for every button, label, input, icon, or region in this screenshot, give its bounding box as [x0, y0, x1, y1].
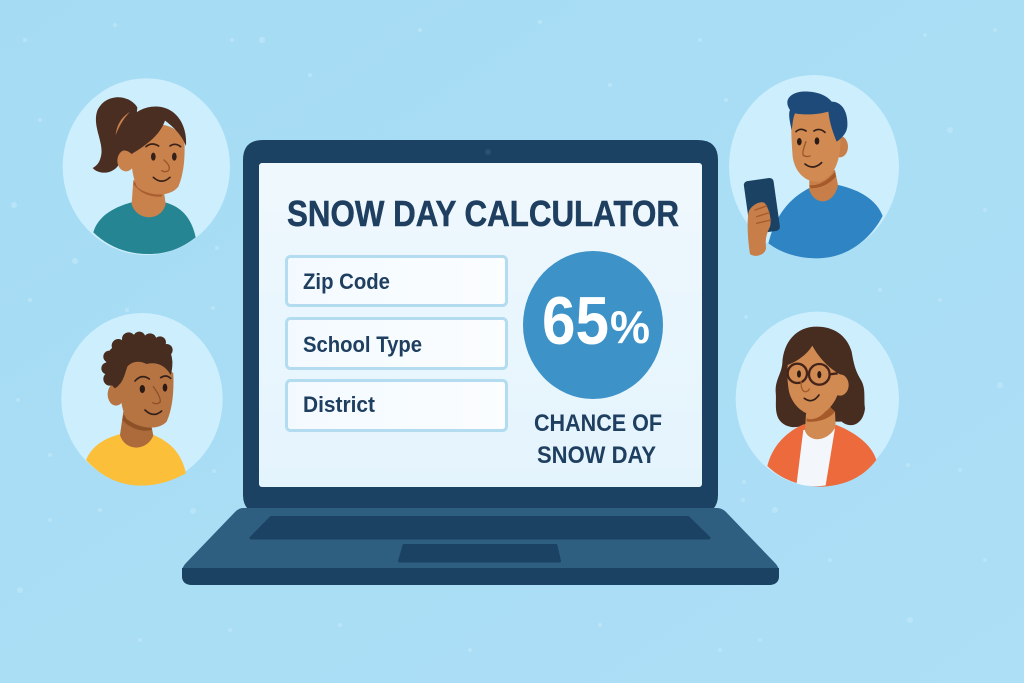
person: woman with glasses [736, 312, 899, 487]
neck [120, 412, 153, 448]
base front edge [182, 568, 779, 585]
facial features [804, 395, 819, 401]
field: district [286, 380, 506, 430]
neck [132, 180, 166, 217]
facial features [135, 376, 171, 414]
field: school type: School Type [303, 332, 422, 357]
face [832, 136, 848, 157]
hair back [776, 327, 865, 427]
neck [809, 170, 838, 201]
result circle: 65%: % [610, 301, 650, 353]
hair [787, 92, 847, 142]
phone [743, 177, 780, 234]
person: woman with ponytail [63, 78, 230, 255]
laptop screen [259, 163, 702, 487]
teal shirt [93, 202, 196, 254]
face [117, 150, 135, 171]
field: zip code [286, 256, 506, 306]
person: man with phone [729, 75, 899, 258]
neck [805, 412, 836, 439]
title: SNOW DAY CALCULATOR [287, 193, 679, 234]
trackpad [400, 546, 560, 561]
keyboard [251, 518, 709, 538]
field: zip code: Zip Code [303, 269, 390, 294]
result circle: 65%: 65 [542, 283, 609, 359]
face [108, 383, 124, 406]
hair top [118, 107, 186, 154]
camera [485, 149, 491, 155]
face [831, 374, 849, 396]
orange jacket [767, 424, 876, 487]
laptop [182, 140, 779, 585]
ponytail [93, 97, 137, 173]
facial features [796, 129, 825, 167]
result label: SNOW DAY [537, 442, 656, 469]
curly hair [101, 332, 173, 388]
laptop lid [243, 140, 718, 510]
result label [534, 410, 662, 469]
result label: CHANCE OF [534, 410, 662, 437]
person: boy with curly hair [61, 313, 223, 486]
facial features [146, 144, 181, 181]
field: district: District [303, 392, 376, 417]
result circle: 65% [523, 251, 663, 399]
white top [797, 428, 835, 486]
laptop base [182, 508, 779, 585]
blue shirt [768, 185, 883, 258]
field: school type [286, 318, 506, 368]
hand [748, 202, 771, 256]
yellow shirt [86, 434, 186, 486]
glasses [788, 364, 838, 385]
